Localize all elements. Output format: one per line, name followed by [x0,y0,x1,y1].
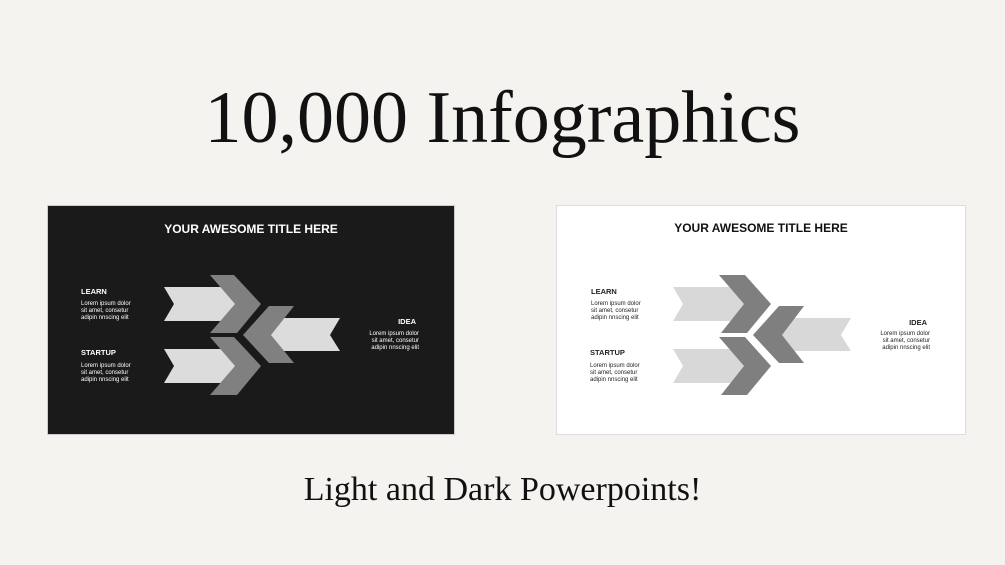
arrows diagram [164,275,340,395]
panel: light slide [556,205,966,435]
slide title: YOUR AWESOME TITLE HERE [164,222,338,236]
text: startup: adipin nnscing elit [81,377,129,383]
text: learn: sit amet, consetur [81,308,128,314]
text: learn: LEARN [81,287,107,296]
text: idea: IDEA [909,318,928,327]
text: idea: IDEA [398,317,417,326]
text: idea: Lorem ipsum dolor [369,331,419,337]
text: learn: LEARN [591,287,617,296]
arrows diagram [673,275,851,395]
text: learn: Lorem ipsum dolor [81,301,131,307]
text: startup: Lorem ipsum dolor [590,363,640,369]
text: idea [880,318,930,351]
text: learn: adipin nnscing elit [81,315,129,321]
text: startup: STARTUP [590,348,625,357]
text: startup [590,348,640,383]
text: idea: sit amet, consetur [883,338,930,344]
panel: dark slide [47,205,455,435]
text: idea: adipin nnscing elit [371,345,419,351]
text: idea: adipin nnscing elit [882,345,930,351]
text: idea: sit amet, consetur [372,338,419,344]
subtitle: Light and Dark Powerpoints! [304,471,701,508]
text: idea: Lorem ipsum dolor [880,331,930,337]
text: learn: adipin nnscing elit [591,315,639,321]
text: startup: sit amet, consetur [590,370,637,376]
text: learn [591,287,641,321]
title: 10,000 Infographics [204,77,800,159]
text: startup [81,348,131,383]
text: startup: STARTUP [81,348,116,357]
slide title: YOUR AWESOME TITLE HERE [674,221,848,235]
text: learn: sit amet, consetur [591,308,638,314]
text: startup: adipin nnscing elit [590,377,638,383]
text: startup: sit amet, consetur [81,370,128,376]
text: startup: Lorem ipsum dolor [81,363,131,369]
text: learn [81,287,131,321]
text: learn: Lorem ipsum dolor [591,301,641,307]
text: idea [369,317,419,351]
